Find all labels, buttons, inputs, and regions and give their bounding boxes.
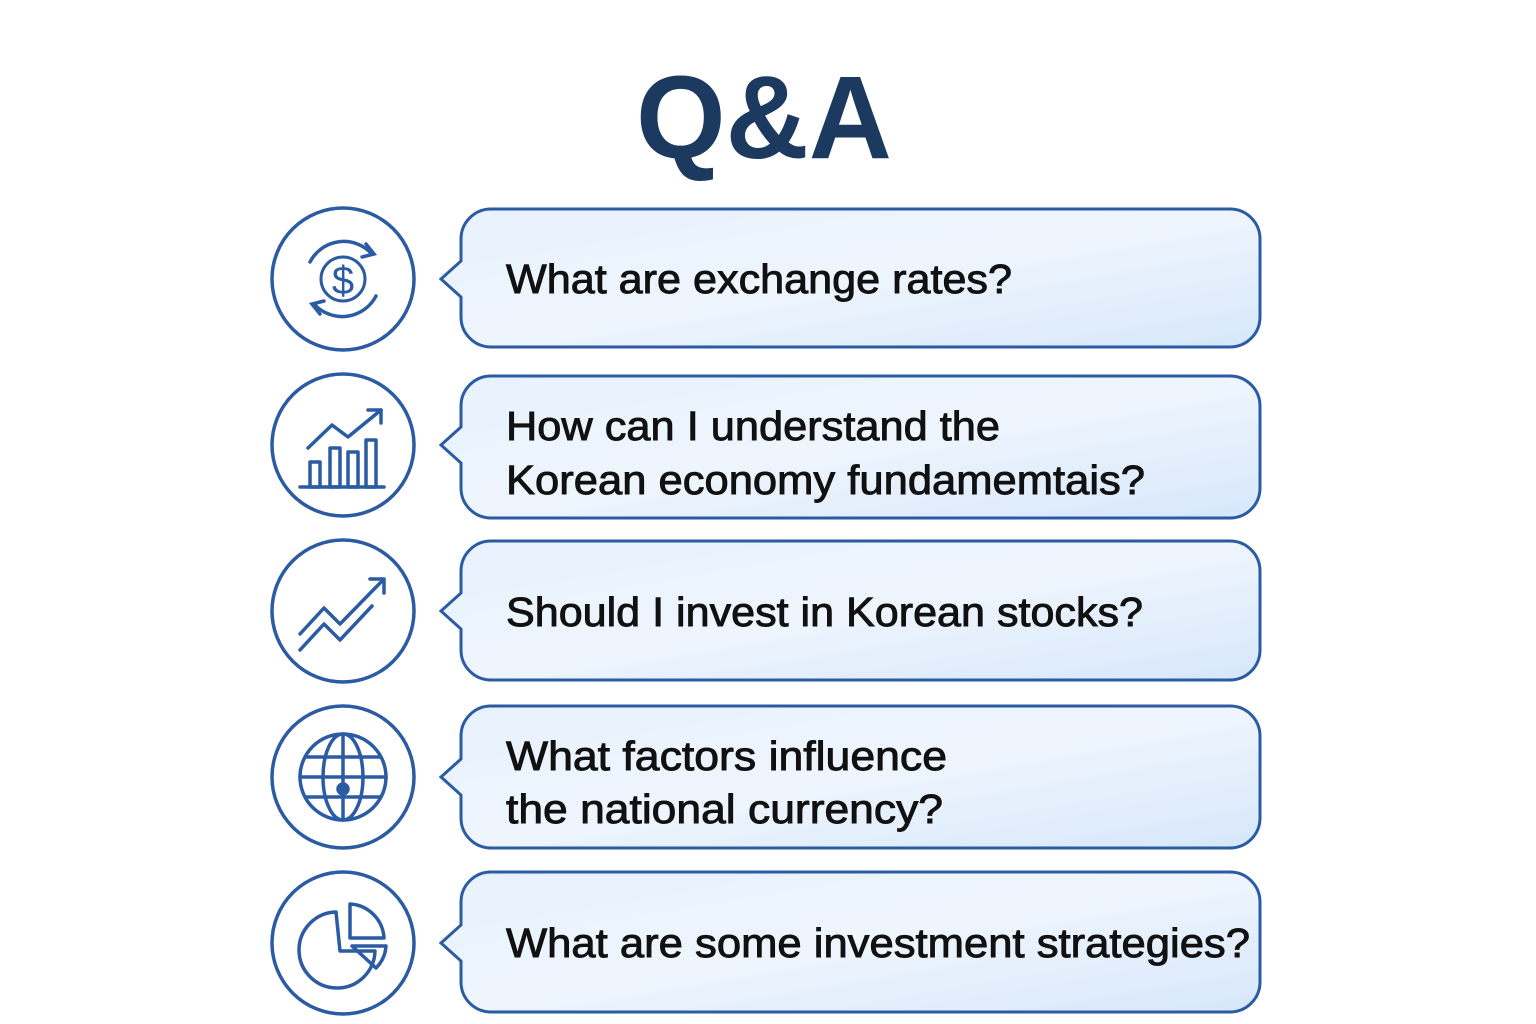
icon: globe xyxy=(272,706,414,848)
bubble 5 xyxy=(441,872,1260,1012)
bubble 4: the national currency? xyxy=(506,786,943,832)
bubble 4 xyxy=(441,706,1260,848)
bubble 1 xyxy=(441,209,1260,347)
icon: bar chart xyxy=(272,374,414,516)
title: Q&A xyxy=(636,52,892,184)
bubble 2: Korean economy fundamemtais? xyxy=(506,457,1145,503)
bubble 5: What are some investment strategies? xyxy=(506,920,1250,966)
row 1: exchange rates xyxy=(272,208,1260,350)
row 3: stocks xyxy=(272,540,1260,682)
icon: dollar exchange xyxy=(272,208,414,350)
icon: pie chart xyxy=(272,872,414,1014)
row 5: investment strategies xyxy=(272,872,1260,1014)
bubble 1: What are exchange rates? xyxy=(506,256,1012,302)
bubble 3 xyxy=(441,541,1260,680)
bubble 2: How can I understand the xyxy=(506,403,1000,449)
icon: dollar exchange: $ xyxy=(332,259,354,303)
row 4: national currency xyxy=(272,706,1260,848)
bubble 2 xyxy=(441,376,1260,518)
row 2: economy fundamentals xyxy=(272,374,1260,518)
bubble 4: What factors influence xyxy=(506,733,947,779)
icon: trend arrow xyxy=(272,540,414,682)
bubble 3: Should I invest in Korean stocks? xyxy=(506,589,1143,635)
